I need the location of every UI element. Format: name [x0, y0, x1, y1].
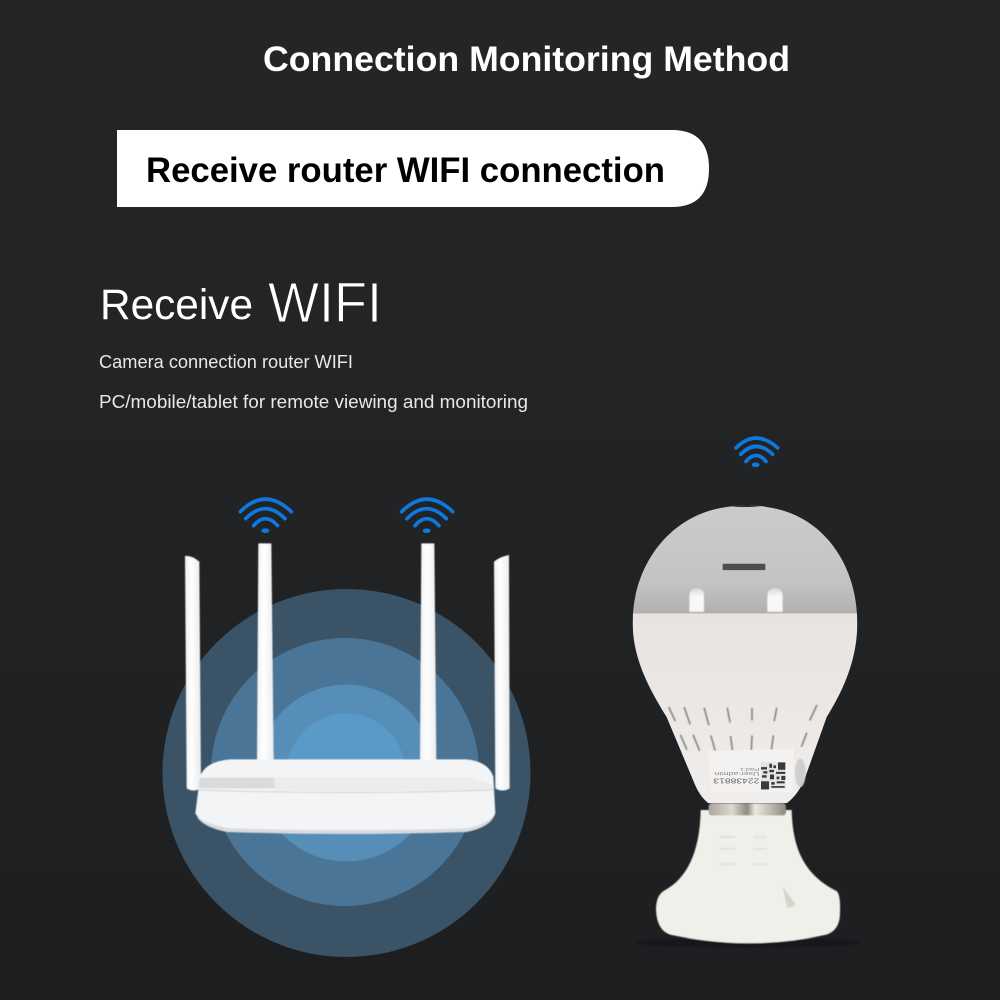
sensor slot: [723, 564, 765, 570]
heading: Receive WIFI: [100, 271, 382, 335]
signal circles: [162, 589, 530, 957]
wifi icon: left antenna: [240, 499, 291, 533]
QR code: [761, 762, 786, 789]
vent slots: [669, 706, 817, 750]
camera lens top: [731, 505, 760, 507]
router: [185, 543, 510, 834]
product label with QR code: User:admin: [714, 770, 759, 776]
product label with QR code: [707, 749, 794, 792]
certification sticker: [795, 759, 806, 787]
product label with QR code: Pwd:1: [739, 767, 759, 772]
description text: PC/mobile/tablet for remote viewing and monitoring: [99, 392, 528, 412]
bulb camera: [630, 503, 863, 948]
heading: Receive WIFI: Receive: [100, 281, 253, 329]
heading: Receive WIFI: WIFI: [268, 271, 382, 335]
wifi icon: right antenna: [402, 499, 453, 533]
product label with QR code: 22438813: [713, 777, 759, 786]
router body: [195, 759, 495, 834]
banner: receive router WIFI connection: Receive router WIFI connection: [146, 151, 665, 190]
description text: [99, 352, 528, 412]
lamp holder base: [635, 810, 862, 948]
metal screw ring: [709, 803, 786, 815]
bulb body: [630, 503, 863, 806]
banner: receive router WIFI connection: [117, 130, 709, 207]
LED highlights: [689, 588, 704, 612]
title: Connection Monitoring Method: [263, 40, 790, 79]
wifi icon: bulb camera: [736, 438, 778, 467]
description text: Camera connection router WIFI: [99, 352, 353, 372]
antennas: [185, 543, 510, 790]
